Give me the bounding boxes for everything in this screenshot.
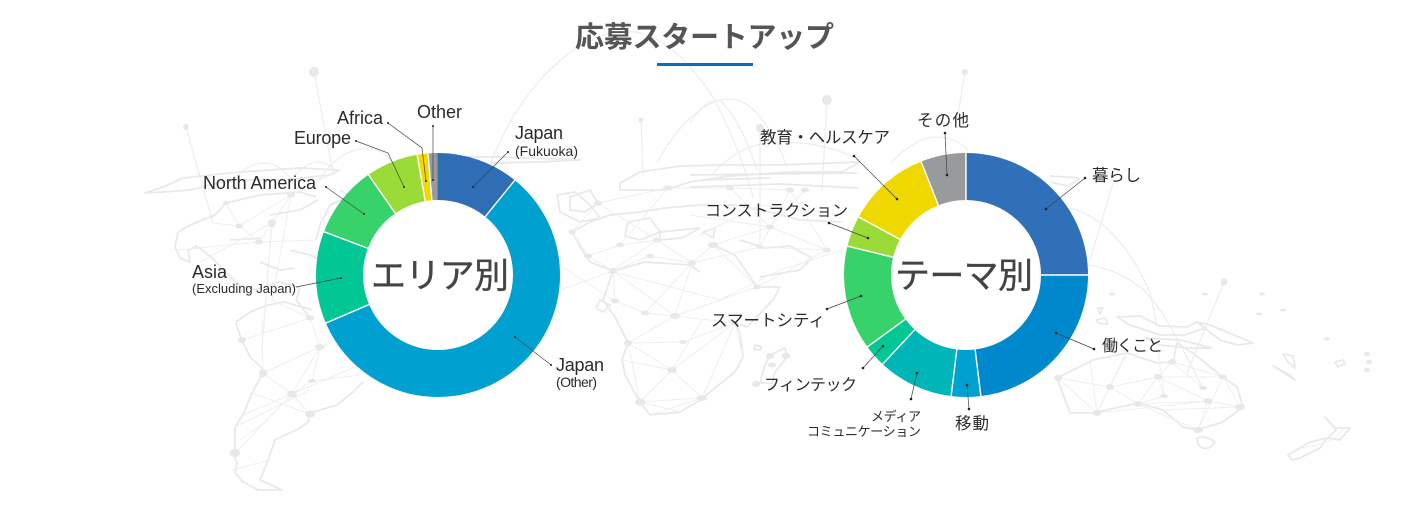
title underline [657, 63, 753, 66]
label: kurashi: 暮らし [1092, 166, 1141, 185]
label: Japan Other: Japan [556, 355, 604, 375]
label: Other: Other [417, 102, 462, 122]
donut center label: area: エリア別 [371, 257, 509, 296]
label: ido: 移動 [955, 414, 989, 433]
background world network map [145, 31, 1372, 490]
label: Japan Other: (Other) [556, 374, 597, 390]
label: media communication: メディア [871, 409, 921, 424]
label: Japan Other [556, 355, 604, 390]
label: education healthcare: 教育・ヘルスケア [760, 128, 890, 147]
label: Japan Fukuoka [515, 123, 578, 159]
labels: theme chart [705, 111, 1163, 439]
donut chart: area [323, 152, 536, 374]
label: Africa: Africa [337, 108, 384, 128]
label: North America: North America [203, 173, 317, 193]
label: smart city: スマートシティ [711, 312, 825, 330]
label: Japan Fukuoka: (Fukuoka) [515, 143, 578, 159]
label: Japan Fukuoka: Japan [515, 123, 563, 143]
donut chart: theme [846, 152, 1089, 397]
label: construction: コンストラクション [705, 202, 848, 220]
label: media communication [807, 409, 921, 439]
leader lines: theme chart [826, 132, 1095, 410]
label: fintech: フィンテック [764, 376, 857, 394]
label: media communication: コミュニケーション [807, 424, 921, 439]
label: Asia [192, 262, 296, 296]
label: Asia: (Excluding Japan) [192, 281, 296, 296]
label: Asia: Asia [192, 262, 228, 282]
label: hataraku koto: 働くこと [1102, 337, 1163, 355]
label: Europe: Europe [294, 128, 351, 148]
label: other: その他 [917, 111, 969, 130]
donut center label: theme: テーマ別 [895, 257, 1033, 296]
labels: area chart [192, 102, 604, 390]
title: 応募スタートアップ [575, 21, 834, 54]
leader lines: area chart [296, 122, 552, 366]
